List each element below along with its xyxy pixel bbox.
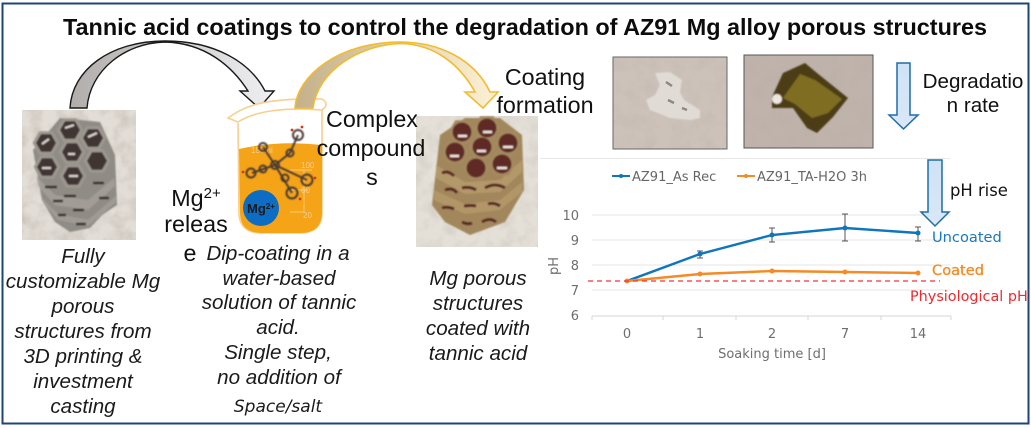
caption: coated structures: Mg porous [429, 267, 527, 290]
Mg ion: 2+ [266, 202, 275, 211]
label: complex compounds [317, 106, 425, 190]
title: Tannic acid coatings to control the degradation of AZ91 Mg alloy porous structures [63, 14, 987, 40]
y axis labels: 9 [571, 234, 579, 249]
label: complex compounds: compound [317, 135, 425, 161]
line chart: pH over soaking time [540, 158, 1028, 362]
legend: AZ91_TA-H2O 3h [757, 170, 867, 185]
beaker with tannic acid solution: 20 [303, 211, 312, 220]
arrow: gold curved arrow from beaker to coated sample [295, 42, 498, 108]
caption: dip-coating: water-based [223, 267, 336, 290]
photo: uncoated Mg porous structure [22, 110, 136, 240]
caption: fully customizable structures: 3D printing & [23, 345, 143, 368]
physiological pH line [588, 280, 940, 282]
beaker with tannic acid solution: 150ml [251, 146, 273, 155]
caption: dip-coating: Dip-coating in a [206, 242, 350, 265]
label: Mg2+ release [164, 185, 228, 266]
x axis labels: 2 [768, 327, 776, 342]
caption: fully customizable structures: porous [51, 295, 114, 318]
label: coated: Coated [932, 262, 984, 279]
arrow: degradation rate down [889, 63, 918, 129]
Mg ion: Mg [247, 201, 266, 216]
label: Mg2+ release: e [184, 240, 196, 266]
arrow: grey curved arrow from sample to beaker [70, 41, 274, 108]
caption: dip-coating: solution of tannic [202, 291, 357, 314]
x axis labels: 14 [910, 327, 926, 342]
x axis labels [623, 327, 926, 342]
caption: coated structures: tannic acid [429, 342, 528, 365]
series: as received [627, 228, 918, 281]
caption: dip-coating: acid. [256, 316, 300, 339]
y axis labels [562, 209, 579, 324]
error bars [697, 214, 921, 258]
label: coating formation: formation [496, 92, 594, 118]
caption: fully customizable structures: investment [33, 370, 134, 393]
caption: dip-coating: Single step, [224, 341, 332, 364]
caption: coated structures: coated with [426, 317, 530, 340]
graduation marks [290, 170, 312, 212]
x axis labels: 0 [623, 327, 631, 342]
caption: coated structures [426, 267, 530, 365]
y axis labels: 7 [571, 284, 579, 299]
label: Mg2+ release: 2+ [204, 185, 221, 202]
label: complex compounds: Complex [326, 106, 418, 132]
caption: fully customizable structures [6, 245, 161, 418]
legend: AZ91_As Rec [632, 170, 716, 185]
photo: coated Mg porous structure [416, 116, 538, 247]
arrow: pH rise down [921, 160, 949, 226]
caption: fully customizable structures: casting [50, 395, 116, 418]
label: degradation rate: Degradatio [923, 70, 1023, 93]
Mg ion [243, 190, 279, 226]
label: degradation rate [923, 70, 1023, 117]
label: physiological pH: Physiological pH [910, 289, 1028, 305]
caption: coated structures: structures [433, 292, 523, 315]
label: coating formation: Coating [505, 64, 585, 90]
caption: dip-coating [202, 242, 357, 417]
molecule [246, 130, 312, 198]
caption: dip-coating: Space/salt [234, 397, 323, 417]
legend [612, 170, 867, 185]
label: Mg2+ release: releas [164, 211, 228, 237]
label: coating formation [496, 64, 594, 118]
photo: coated degraded sample [744, 55, 873, 148]
y axis labels: 6 [571, 309, 579, 324]
beaker with tannic acid solution: 100 [301, 161, 315, 170]
caption: fully customizable structures: customizable Mg [6, 270, 161, 293]
x axis labels: 1 [696, 327, 704, 342]
label: degradation rate: n rate [947, 94, 999, 117]
y axis labels: 8 [571, 259, 579, 274]
x axis labels: 7 [841, 327, 849, 342]
label: pH rise: pH rise [950, 181, 1008, 200]
y axis title: pH [547, 257, 562, 275]
beaker with tannic acid solution [228, 99, 326, 233]
series: coated [627, 271, 918, 281]
label: uncoated: Uncoated [932, 229, 1002, 246]
label: Mg2+ release: Mg [171, 185, 204, 211]
label: complex compounds: s [366, 164, 378, 190]
y axis labels: 10 [562, 209, 579, 224]
beaker with tannic acid solution: 60 [301, 186, 310, 195]
caption: fully customizable structures: Fully [61, 245, 106, 268]
caption: fully customizable structures: structures from [14, 320, 152, 343]
photo: degraded uncoated sample [613, 57, 727, 149]
x axis title: Soaking time [d] [718, 347, 826, 362]
caption: dip-coating: no addition of [217, 366, 343, 389]
